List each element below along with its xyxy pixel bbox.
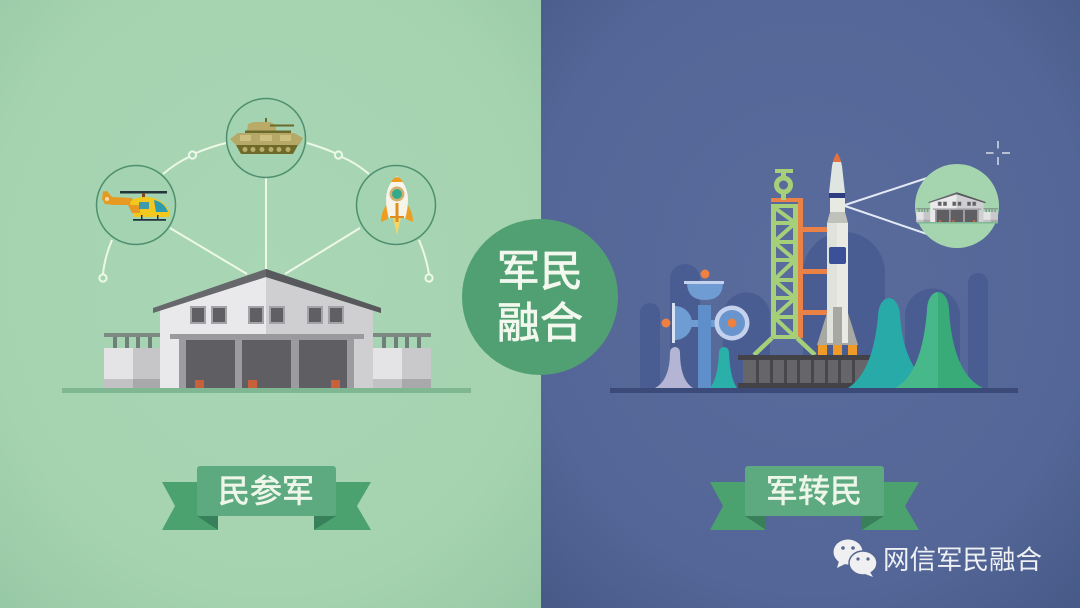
ribbon: 军转民: 军转民 — [766, 473, 862, 509]
ribbon: 民参军 — [162, 466, 371, 530]
panel: right blue background — [541, 0, 1080, 608]
illustration: launch rocket — [817, 153, 858, 355]
ground line: left — [62, 388, 471, 393]
ground line: right — [610, 388, 1018, 393]
illustration: factory building — [104, 269, 431, 388]
center badge: 军民融合 — [462, 219, 618, 375]
icon: rocket in circle — [356, 166, 436, 244]
icon: tank in circle — [226, 98, 306, 178]
watermark: account name: 网信军民融合 — [883, 545, 1042, 575]
connector lines: left network — [99, 143, 433, 282]
watermark: WeChat icon — [834, 540, 877, 577]
illustration: background silhouettes — [640, 232, 988, 388]
illustration: radar dishes — [655, 270, 750, 388]
illustration: launch platform — [738, 355, 872, 388]
center badge: 军民融合: 军民 — [497, 248, 583, 296]
ribbon: 军转民 — [710, 466, 919, 530]
illustration: teal and green hills — [848, 292, 983, 388]
icon: helicopter in circle — [96, 166, 176, 244]
ribbon: 民参军: 民参军 — [218, 473, 314, 509]
inset: factory in circle with pointer lines — [845, 164, 999, 248]
center badge: 军民融合: 融合 — [497, 300, 583, 348]
illustration: launch tower — [754, 169, 828, 355]
panel: left green background — [0, 0, 541, 608]
icon: crosshair sparkle — [986, 141, 1010, 165]
